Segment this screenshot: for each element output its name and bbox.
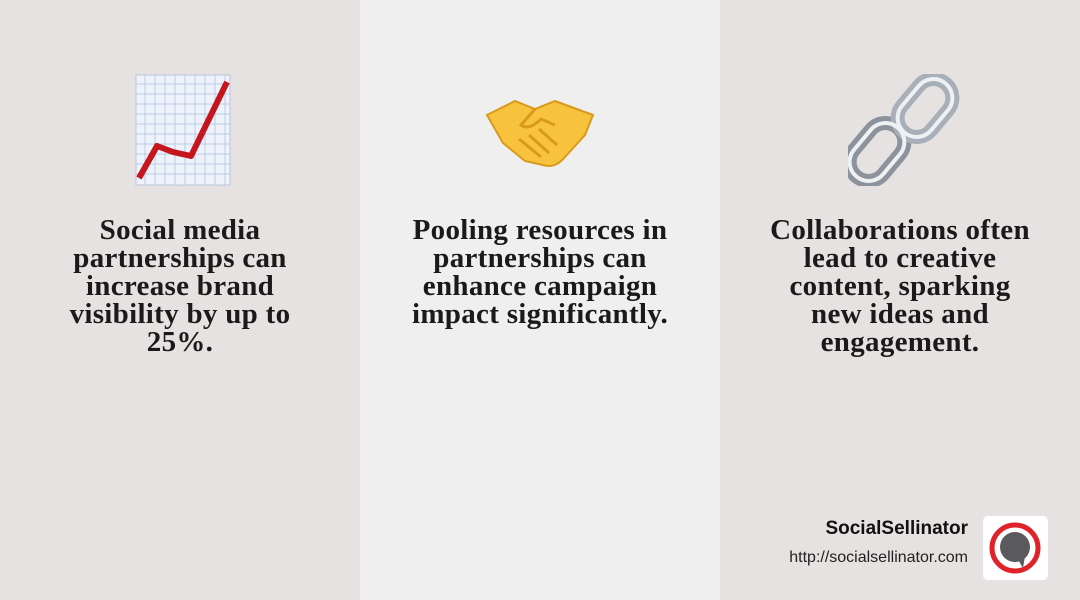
icon: chain link: [848, 74, 960, 186]
panel: collaborations: [720, 0, 1080, 600]
panel: visibility: [0, 0, 360, 600]
text: visibility stat: visibility by up to: [70, 298, 290, 330]
text: collaborations: [770, 214, 1030, 358]
text: collaborations: new ideas and: [811, 298, 989, 330]
text: visibility stat: 25%.: [147, 326, 213, 358]
panel: resources: [360, 0, 720, 600]
text: pooling resources: partnerships can: [433, 242, 647, 274]
icon: handshake: [486, 100, 594, 167]
url: http://socialsellinator.com: [789, 549, 968, 566]
text: collaborations: lead to creative: [804, 242, 996, 274]
text: pooling resources: impact significantly.: [412, 298, 668, 330]
logo: [983, 516, 1048, 580]
text: pooling resources: [412, 214, 668, 330]
brand name: SocialSellinator: [825, 518, 968, 539]
text: visibility stat: increase brand: [86, 270, 274, 302]
text: visibility stat: partnerships can: [73, 242, 287, 274]
text: visibility stat: [70, 214, 290, 358]
text: visibility stat: Social media: [100, 214, 260, 246]
text: collaborations: Collaborations often: [770, 214, 1030, 246]
text: collaborations: content, sparking: [789, 270, 1010, 302]
icon: chart: [136, 74, 230, 186]
text: pooling resources: Pooling resources in: [413, 214, 667, 246]
text: collaborations: engagement.: [821, 326, 979, 358]
text: pooling resources: enhance campaign: [423, 270, 657, 302]
